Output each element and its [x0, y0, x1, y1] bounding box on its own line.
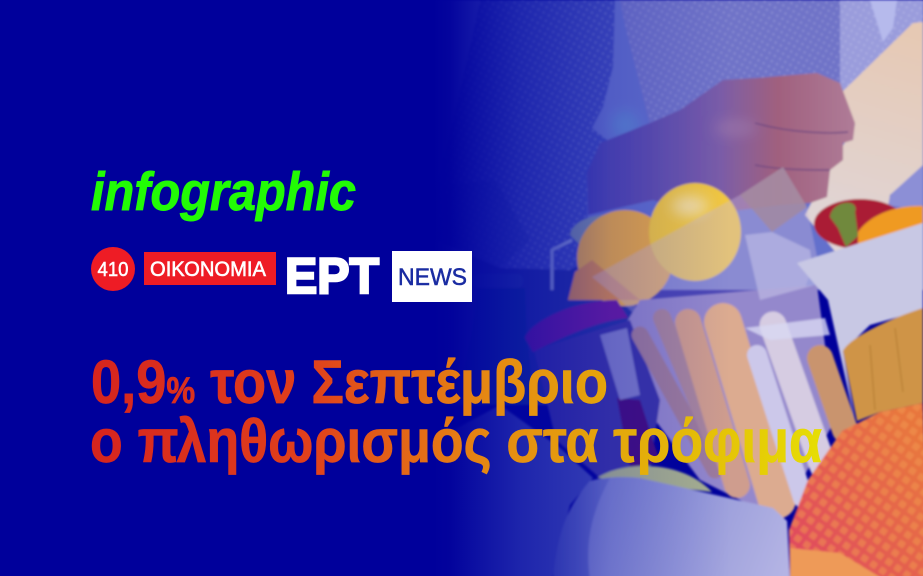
upper yellow pepper [649, 183, 741, 281]
logo: OIKONOMIA label: ΟΙΚΟΝΟΜΙΑ [150, 257, 267, 281]
jar [525, 300, 660, 478]
biscuits [640, 318, 845, 500]
logo: OIKONOMIA label [144, 252, 276, 285]
logo: NEWS box: NEWS [398, 264, 467, 291]
teal glow in gap [611, 111, 639, 139]
orange behind jar [568, 260, 640, 300]
white box left facet [553, 478, 610, 576]
red pepper [814, 199, 906, 249]
white box [553, 477, 790, 576]
grey handle knob [570, 214, 623, 247]
title line 2: ο πληθωρισμός στα τρόφιμα [90, 406, 822, 475]
pepper highlight [672, 197, 708, 215]
logo: ΕΡΤ: ΕΡΤ [285, 248, 379, 304]
lower yellow pepper [577, 210, 673, 306]
finger shadows [755, 123, 848, 170]
shirt lower right patch [885, 160, 923, 210]
shirt sleeve [435, 0, 615, 270]
hand [587, 73, 855, 215]
logo: NEWS box [392, 251, 472, 302]
shirt placket [840, 0, 923, 100]
pasta shading [870, 328, 903, 410]
orange pepper [858, 206, 923, 245]
pepper stem [830, 203, 858, 247]
bag sheen [745, 318, 830, 340]
orange net bag [789, 403, 923, 576]
gap behind the shirt [435, 0, 923, 290]
apple [597, 466, 712, 492]
receipt [805, 22, 923, 255]
heading: infographic: infographic [91, 162, 356, 222]
logo: 410 badge [91, 247, 135, 291]
shirt torso [620, 0, 845, 125]
basket handle [552, 240, 572, 290]
logo: 410 badge: 410 [98, 259, 128, 281]
plastic bag [592, 167, 835, 520]
dark lower area [435, 255, 635, 405]
photo: hand with receipt and groceries [435, 0, 923, 576]
title line 1: 0,9% τον Σεπτέμβριο [91, 347, 608, 416]
left white bottle [435, 405, 593, 576]
white package [797, 223, 923, 421]
knuckle highlight [713, 120, 757, 136]
left blue fade over photo [425, 0, 730, 576]
pasta [843, 308, 923, 421]
bottle [458, 274, 535, 405]
